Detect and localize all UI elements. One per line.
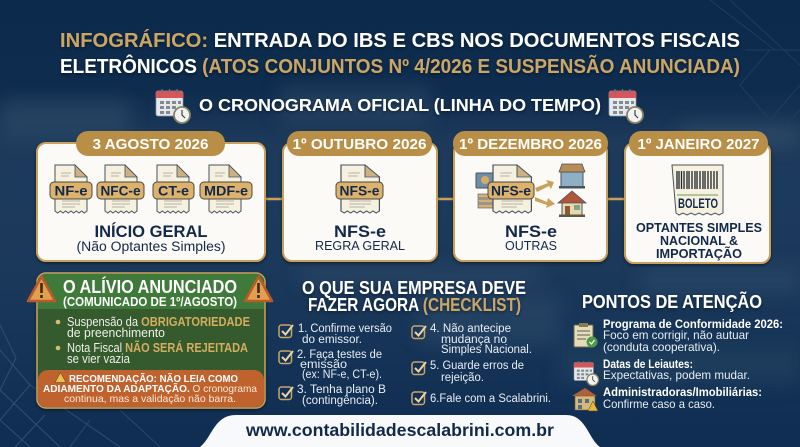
item 4: mudança no <box>441 334 507 346</box>
card subtitle: REGRA GERAL <box>315 239 405 253</box>
heading: FAZER AGORA (CHECKLIST) <box>308 294 521 315</box>
subtitle: cronograma <box>156 89 643 123</box>
point: programa de conformidade: Foco em corrigir, não autuar <box>603 328 749 342</box>
card title: NFS-e <box>505 222 557 241</box>
document: NF-e: NF-e <box>54 184 88 198</box>
panel: 1 dezembro 2026 <box>453 131 608 261</box>
recommendation box <box>38 370 264 407</box>
icon: warning left <box>28 276 55 301</box>
item 5: 5. Guarde erros de <box>430 360 524 372</box>
panel: pontos de atenção <box>572 291 783 411</box>
title: INFOGRÁFICO: ENTRADA DO IBS E CBS NOS DOCUMENTOS FISCAIS <box>60 29 740 52</box>
point: datas de leiautes <box>574 357 750 385</box>
panel: 1 outubro 2026 <box>283 131 437 261</box>
icon: warning right <box>245 276 272 301</box>
icon: monitor and coins <box>476 173 494 208</box>
panel: 1 janeiro 2027 <box>625 131 770 263</box>
document: CT-e <box>153 165 194 213</box>
card text: OPTANTES SIMPLES <box>636 220 762 235</box>
document: NFS-e: NFS-e <box>340 184 380 198</box>
item 3: (contingência). <box>302 395 378 407</box>
point: programa de conformidade: Programa de Conformidade 2026: <box>603 317 783 331</box>
point: administradoras: Administradoras/Imobiliárias: <box>603 385 762 399</box>
date pill <box>76 131 225 156</box>
footer website: www.contabilidadescalabrini.com.br <box>245 420 554 440</box>
point: administradoras: Confirme caso a caso. <box>603 397 715 411</box>
document: MDF-e: MDF-e <box>204 184 249 198</box>
heading <box>302 277 526 315</box>
date pill <box>453 131 608 156</box>
bullet 1: de preenchimento <box>67 326 165 340</box>
point: programa de conformidade <box>574 317 783 354</box>
point: datas de leiautes: Expectativas, podem mudar. <box>603 368 750 382</box>
item 4: 4. Não antecipe <box>430 323 511 335</box>
item 4: Simples Nacional. <box>441 344 532 356</box>
item 2: 2. Faça testes de <box>297 349 382 361</box>
card text <box>636 220 762 261</box>
item 3: 3. Tenha plano B <box>297 384 386 396</box>
document: NFS-e <box>488 165 534 213</box>
date pill <box>287 131 432 156</box>
date pill: 1º JANEIRO 2027 <box>638 136 760 153</box>
heading: O ALÍVIO ANUNCIADO <box>63 276 237 297</box>
bullet 2: Nota Fiscal NÃO SERÁ REJEITADA <box>67 340 248 355</box>
green header <box>38 274 264 309</box>
timeline heading: O CRONOGRAMA OFICIAL (LINHA DO TEMPO) <box>199 95 601 115</box>
item 4 <box>412 323 532 356</box>
item 2 <box>279 349 382 381</box>
bullet 1: Suspensão da OBRIGATORIEDADE <box>67 315 250 329</box>
item 3 <box>279 384 386 407</box>
card text: NACIONAL & <box>660 233 738 248</box>
card subtitle: (Não Optantes Simples) <box>76 239 226 254</box>
title: ELETRÔNICOS (ATOS CONJUNTOS Nº 4/2026 E SUSPENSÃO ANUNCIADA) <box>60 54 740 78</box>
arrows <box>535 180 555 208</box>
heading: O QUE SUA EMPRESA DEVE <box>302 277 526 298</box>
card title: NFS-e <box>334 222 386 241</box>
panel: o alívio anunciado <box>28 273 272 408</box>
item 1: 1. Confirme versão <box>298 323 392 335</box>
item 2: (ex: NF-e, CT-e). <box>302 369 382 381</box>
item 5 <box>412 360 524 384</box>
document: NF-e <box>50 165 92 213</box>
panel: 3 agosto 2026 <box>37 131 265 261</box>
timeline connectors <box>265 198 625 200</box>
title <box>60 29 740 78</box>
document: MDF-e <box>200 165 252 213</box>
recommendation box: RECOMENDAÇÃO: NÃO LEIA COMO <box>69 372 238 385</box>
icon: calendar right <box>609 89 643 123</box>
point: datas de leiautes: Datas de Leiautes: <box>603 357 693 371</box>
bullet 2 <box>56 340 248 366</box>
subheading: (COMUNICADO DE 1º/AGOSTO) <box>63 294 237 309</box>
date pill <box>629 131 768 156</box>
document: NFS-e: NFS-e <box>491 184 531 198</box>
document: NFC-e <box>97 165 144 213</box>
bullet 1 <box>56 315 250 340</box>
date pill: 3 AGOSTO 2026 <box>92 136 208 153</box>
icon: boleto <box>672 165 723 215</box>
icon: house <box>558 191 586 217</box>
panel: checklist <box>279 277 551 407</box>
icon: store <box>559 164 585 188</box>
item 2: emissão <box>300 359 347 371</box>
card title: INÍCIO GERAL <box>94 222 208 241</box>
heading: PONTOS DE ATENÇÃO <box>582 291 762 312</box>
card text: IMPORTAÇÃO <box>656 246 742 261</box>
item 1: do emissor. <box>302 334 362 346</box>
item 1 <box>279 323 392 346</box>
date pill: 1º DEZEMBRO 2026 <box>459 136 602 153</box>
recommendation box: ADIAMENTO DA ADAPTAÇÃO. O cronograma <box>43 382 257 395</box>
icon: boleto: BOLETO <box>678 196 718 211</box>
document: CT-e: CT-e <box>158 184 190 198</box>
date pill: 1º OUTUBRO 2026 <box>292 136 426 153</box>
document: NFC-e: NFC-e <box>100 184 141 198</box>
icon: calendar left <box>156 89 190 123</box>
footer website <box>200 415 600 447</box>
document: NFS-e <box>336 165 383 213</box>
recommendation box: continua, mas a validação não barra. <box>64 393 236 405</box>
point: administradoras <box>572 385 762 411</box>
card subtitle: OUTRAS <box>505 239 557 253</box>
item 5: rejeição. <box>441 372 484 384</box>
item 6: 6.Fale com a Scalabrini. <box>430 393 551 405</box>
bullet 2: se vier vazia <box>67 352 130 366</box>
point: programa de conformidade: (conduta cooperativa). <box>603 340 720 354</box>
